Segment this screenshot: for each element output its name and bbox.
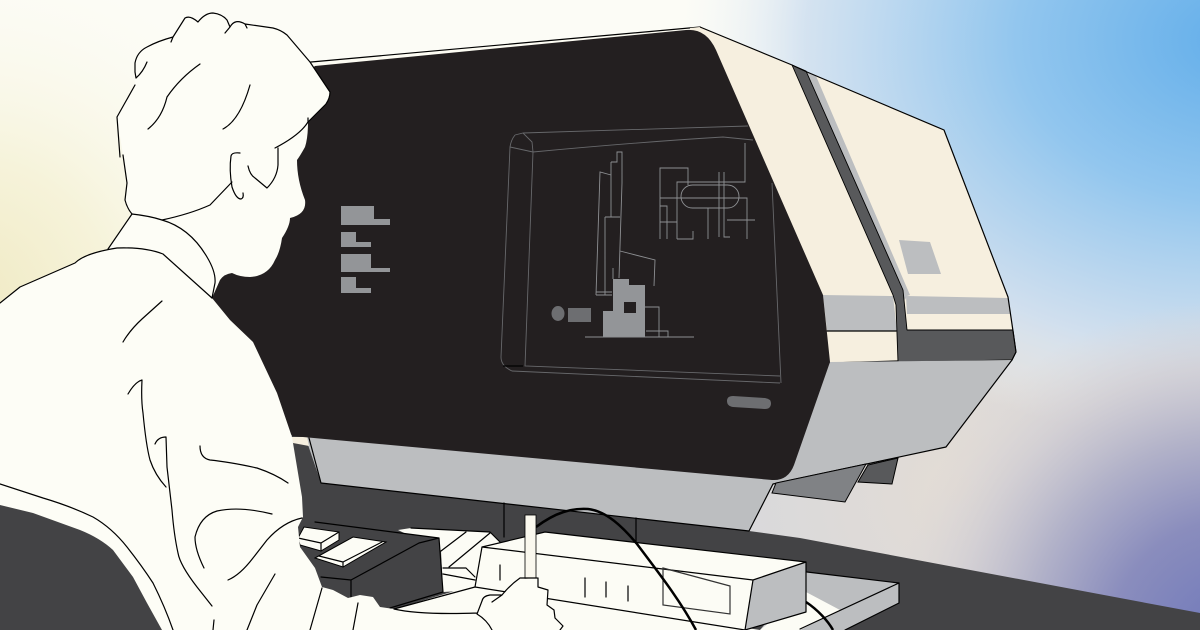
indicator ticks [500,565,628,601]
sleeve folds [155,437,358,630]
hairline at neck [162,182,232,220]
underside shelf grey [858,458,898,484]
desk and dark underside [290,436,1200,630]
CAD drawing: circuit plan [660,143,755,239]
keyboard unit [394,532,806,630]
chair back [0,505,162,630]
underside shelf mid grey [772,464,866,502]
right tray [760,572,899,630]
hair strands [148,64,308,148]
unit edges [394,532,806,630]
screen pill button [727,396,771,409]
lower housing outline [309,360,1012,531]
box edges [315,522,443,608]
dark vertical strip and lower band [792,65,1016,362]
chair edge line [0,484,173,630]
monitor top white strip [300,27,730,75]
back of head [117,85,135,214]
collar [108,214,215,298]
box body [298,522,443,608]
hand and cuff [394,578,563,630]
housing outline [700,27,1016,360]
menu blocks [341,206,390,293]
shoulder line [0,248,212,303]
light pen stylus [525,515,536,579]
display window [663,568,730,614]
shirt folds [123,301,166,487]
ear [230,153,243,199]
side face [745,562,806,630]
lower grey housing [305,360,1012,531]
grey band right [906,296,1010,314]
operator silhouette [0,13,563,630]
CAD drawing: elevation [552,152,694,337]
white tray under keyboard unit [380,585,760,630]
top and front faces [475,532,806,630]
cream sliver at the screen base [290,437,309,446]
cable front section [806,602,833,630]
sideburn [248,148,278,188]
terminal monitor [200,27,1016,531]
cable [536,509,696,630]
grey label plate [899,240,941,274]
chair and operator figure [0,13,563,630]
left cream housing [690,27,899,363]
light grey shadow strip [806,72,910,300]
inner screen frame [501,126,781,383]
key two [315,537,386,567]
right cream housing [806,72,1013,331]
hair outline [135,13,330,122]
back paper on the desk [398,528,500,592]
grey band left [823,295,897,331]
dark screen face [200,30,830,480]
left keyboard box [298,522,443,608]
lower horizontal line [827,331,898,363]
stand posts [504,503,636,542]
key one [298,527,339,551]
